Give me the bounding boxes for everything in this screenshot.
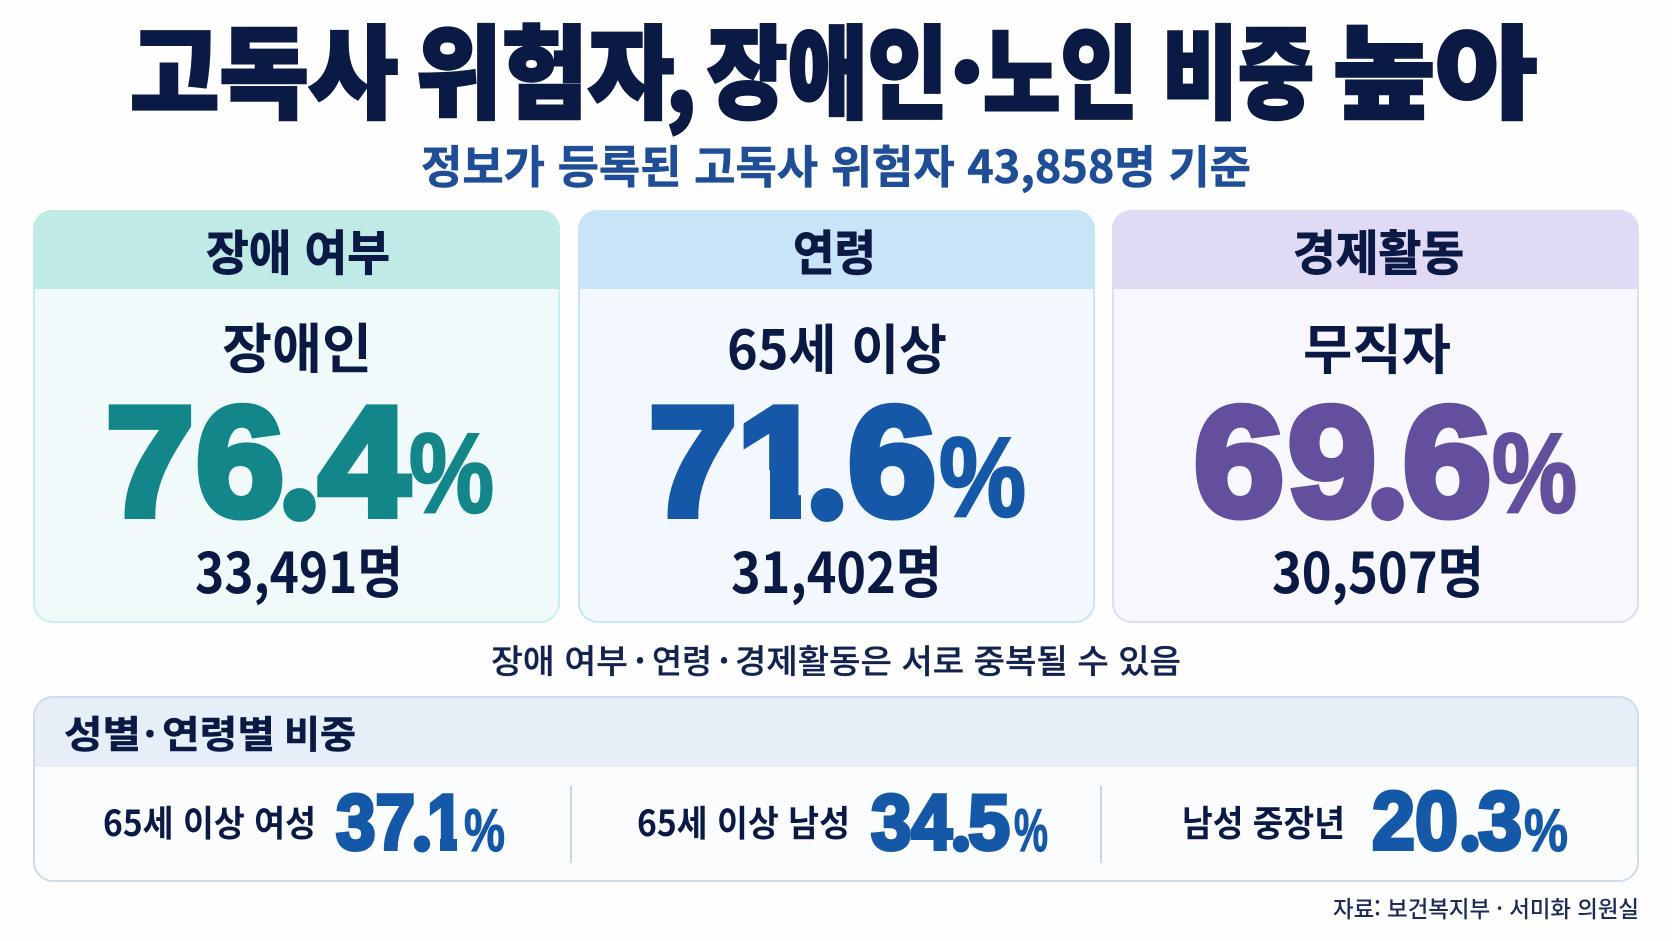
big number: 76.4%: 4 xyxy=(319,375,409,548)
panel heading: gender and age: 연령별 xyxy=(162,704,275,759)
stat: women 65 and over: . xyxy=(409,761,435,873)
big number: 69.6% xyxy=(1194,336,1577,561)
panel heading: gender and age: 성별 xyxy=(64,704,141,759)
panel: economic activity xyxy=(1112,210,1639,622)
big number: 71.6%: 6 xyxy=(848,375,936,548)
note: 장애 여부 xyxy=(491,635,628,683)
big number: 71.6%: % xyxy=(939,414,1026,540)
stat: middle-aged men: 3 xyxy=(1478,774,1522,867)
stat: middle-aged men: 남성 중장년 xyxy=(1182,795,1345,847)
stat: men 65 and over: 5 xyxy=(968,778,1010,866)
stat: middle-aged men: 20 xyxy=(1372,774,1458,867)
big number: 71.6% xyxy=(652,402,1024,522)
title xyxy=(130,0,1537,140)
note: 경제활동은 서로 중복될 수 있음 xyxy=(735,635,1181,683)
count: 30,507: 30,507명 xyxy=(1272,529,1484,610)
big number: 69.6%: 6 xyxy=(1403,375,1491,548)
big number: 69.6%: 6 xyxy=(1194,375,1284,548)
label: unemployed: 무직자 xyxy=(1303,306,1451,385)
note: 연령 xyxy=(652,635,712,683)
panel heading: gender and age: · xyxy=(144,704,156,759)
big number: 69.6%: 9 xyxy=(1288,375,1376,548)
stat: men 65 and over xyxy=(637,761,1048,873)
big number: 76.4%: % xyxy=(409,410,494,536)
big number: 69.6%: % xyxy=(1492,410,1577,536)
stat: middle-aged men xyxy=(1182,754,1568,874)
stat: women 65 and over: 65세 이상 여성 xyxy=(103,795,316,847)
note: · xyxy=(719,635,729,683)
source: 자료: 보건복지부 · 서미화 의원실 xyxy=(1333,890,1639,924)
big number: 69.6%: . xyxy=(1362,336,1413,561)
stat: men 65 and over: 65세 이상 남성 xyxy=(637,795,850,847)
stat: women 65 and over xyxy=(104,792,504,852)
stat: women 65 and over: 37 xyxy=(336,778,415,866)
stat: women 65 and over: 1 xyxy=(427,778,464,866)
panel: age xyxy=(578,210,1095,622)
big number: 76.4%: 6 xyxy=(196,375,284,548)
stat: middle-aged men: % xyxy=(1524,797,1568,864)
big number: 76.4%: 7 xyxy=(106,375,194,548)
label: 65 and over: 65세 이상 xyxy=(727,306,947,385)
count: 33,491: 33,491명 xyxy=(195,529,403,610)
panel heading: economic activity: 경제활동 xyxy=(1293,214,1464,284)
panel heading: gender and age xyxy=(64,704,356,759)
subtitle: 정보가 등록된 고독사 위험자 43,858명 기준 xyxy=(421,131,1251,196)
stat: middle-aged men: . xyxy=(1456,754,1484,874)
panel heading: disability: 장애 여부 xyxy=(206,214,390,284)
big number: 76.4%: . xyxy=(274,337,325,562)
stat: men 65 and over: 34 xyxy=(871,778,952,866)
stat: women 65 and over: % xyxy=(464,797,505,864)
panel: gender and age share xyxy=(34,697,1638,881)
panel heading: age: 연령 xyxy=(793,214,876,284)
count: 31,402: 31,402명 xyxy=(731,529,942,610)
big number: 76.4% xyxy=(106,337,494,562)
panel: disability xyxy=(33,210,560,622)
stat: men 65 and over: . xyxy=(948,761,974,873)
big number: 71.6%: 7 xyxy=(649,375,737,548)
big number: 71.6%: . xyxy=(802,337,852,562)
note xyxy=(491,635,1181,683)
big number: 71.6%: 1 xyxy=(737,375,823,548)
panel heading: gender and age: 비중 xyxy=(284,704,356,759)
note: · xyxy=(635,635,645,683)
label: disabled: 장애인 xyxy=(222,305,372,384)
stat: men 65 and over: % xyxy=(1014,797,1048,864)
